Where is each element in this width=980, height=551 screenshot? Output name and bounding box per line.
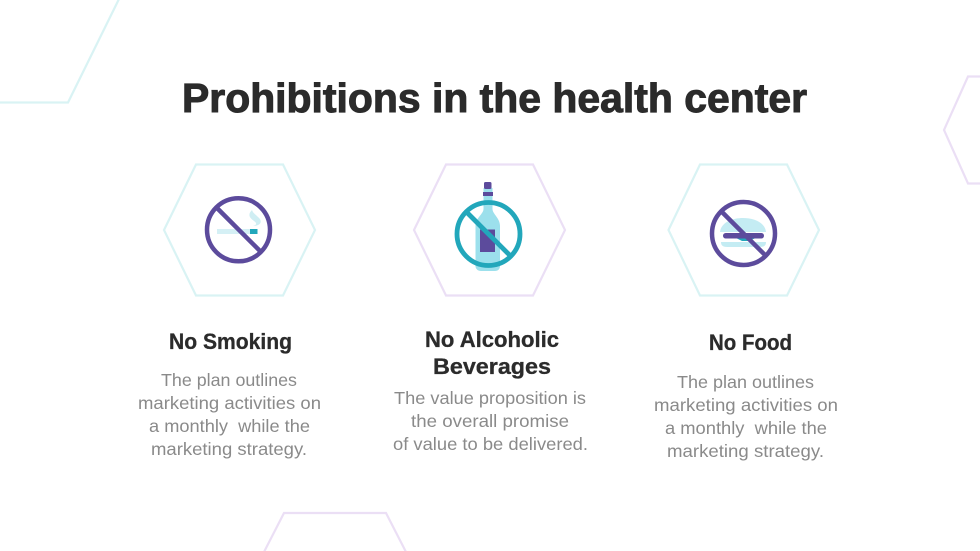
background hexagon: top left: [0, 0, 119, 102]
icon: no alcohol: [457, 182, 520, 271]
icon: no smoking: [207, 198, 270, 261]
icon: no food: [712, 202, 775, 265]
text block: no smoking: marketing activities on: [138, 393, 321, 413]
text block: no smoking: [138, 370, 321, 459]
text block: no alcoholic beverages: The value proposition is: [394, 388, 586, 408]
hexagon frame: food: [668, 164, 819, 296]
text block: no food: marketing strategy.: [667, 441, 824, 461]
heading: no alcoholic beverages: [425, 327, 559, 379]
hexagon frame: alcohol: [414, 164, 565, 296]
hexagon frame: smoking: [164, 164, 315, 296]
text block: no smoking: a monthly while the: [149, 416, 310, 436]
text block: no smoking: The plan outlines: [161, 370, 297, 390]
heading: no food: No Food: [709, 330, 792, 355]
text block: no food: marketing activities on: [654, 395, 838, 415]
background hexagon: right edge: [944, 76, 980, 184]
text block: no food: The plan outlines: [677, 372, 814, 392]
text block: no alcoholic beverages: [393, 388, 588, 454]
heading: no smoking: No Smoking: [169, 329, 292, 354]
panel: no alcoholic beverages: [393, 164, 588, 454]
heading: no alcoholic beverages: No Alcoholic: [425, 327, 559, 352]
background hexagon: bottom: [264, 513, 406, 551]
text block: no alcoholic beverages: the overall promise: [411, 411, 569, 431]
text block: no food: [654, 372, 838, 461]
text block: no food: a monthly while the: [665, 418, 827, 438]
title: Prohibitions in the health center: [182, 75, 807, 121]
text block: no alcoholic beverages: of value to be delivered.: [393, 434, 588, 454]
text block: no smoking: marketing strategy.: [151, 439, 307, 459]
panel: no food: [654, 164, 838, 461]
heading: no alcoholic beverages: Beverages: [433, 354, 551, 379]
panel: no smoking: [138, 164, 321, 459]
